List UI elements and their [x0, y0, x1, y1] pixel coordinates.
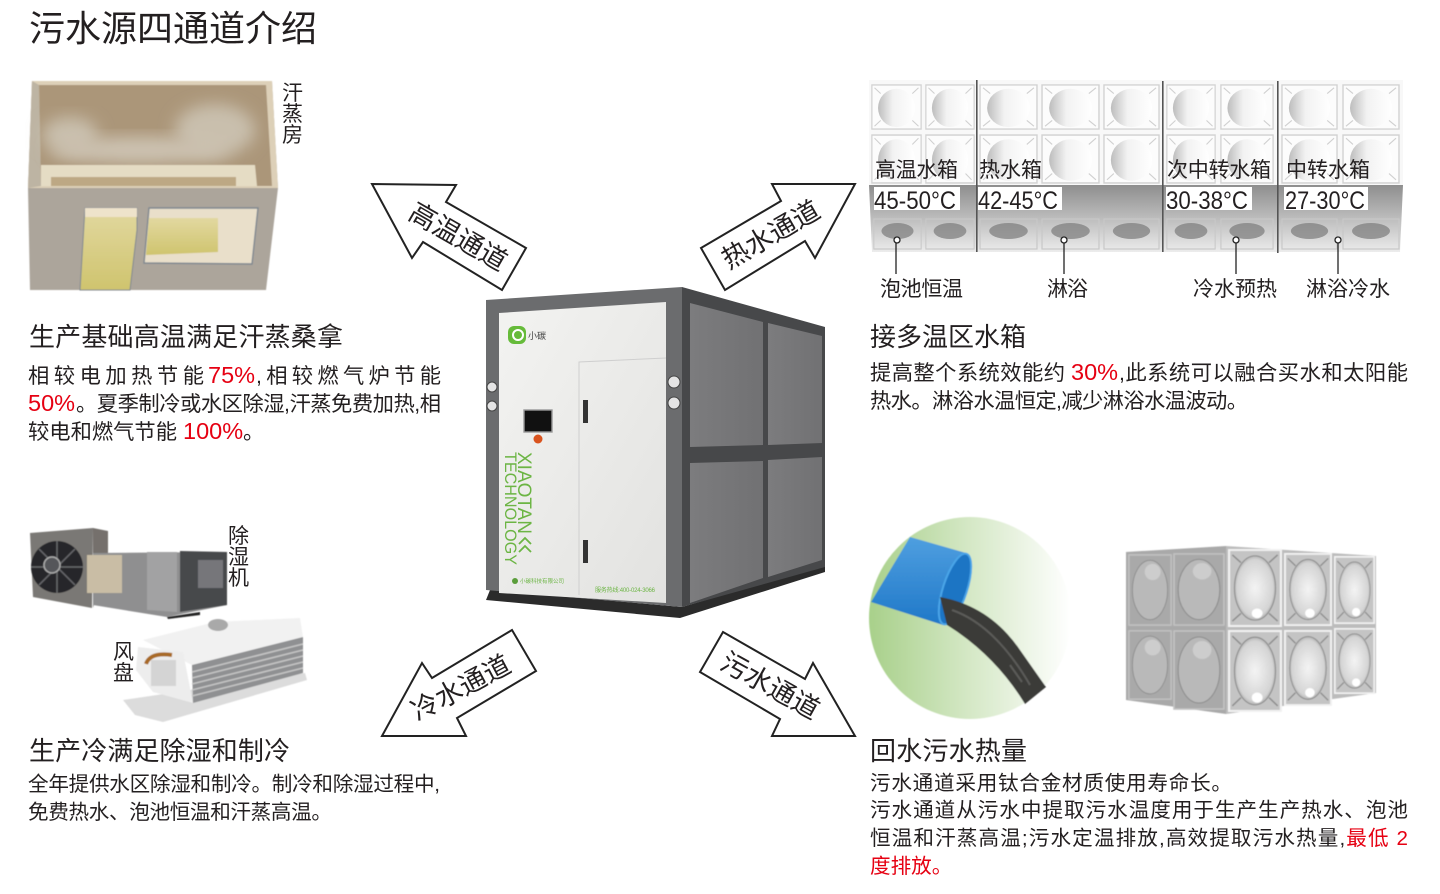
- pointer: shower cold water: 淋浴冷水: [1306, 278, 1390, 301]
- arrow: sewage channel: 污水通道: [715, 647, 825, 725]
- tank label: hot water: [978, 159, 1062, 215]
- tank label: high temperature: [874, 159, 960, 215]
- body text: 提高整个系统效能约: [870, 361, 1065, 385]
- label: dehumidifier: 除: [228, 525, 249, 548]
- arrow: hot water channel: [701, 184, 855, 290]
- tank label: secondary transfer: [1166, 159, 1271, 215]
- arrow: cold water channel: [382, 630, 536, 736]
- body text: 热水。淋浴水温恒定,减少淋浴水温波动。: [870, 389, 1248, 413]
- body text: ,此系统可以融合买水和太阳能: [1119, 361, 1408, 385]
- small print: 服务热线:400-024-3066: [595, 586, 656, 594]
- heading: 回水污水热量: [870, 736, 1027, 766]
- tank label: hot water: 42-45°C: [978, 187, 1058, 215]
- body text: 50%: [28, 390, 75, 416]
- tank label: secondary transfer: 30-38°C: [1166, 187, 1248, 215]
- logo: 小碳: [528, 330, 546, 341]
- label: fan coil: 风: [113, 641, 134, 664]
- brand text: TECHNOLOGY: [501, 452, 519, 565]
- tank label: high temperature: 45-50°C: [874, 187, 956, 215]
- label: dehumidifier: [228, 525, 249, 590]
- panel: hot water channel: [869, 80, 1408, 413]
- illustration: multi-temperature water tanks: [869, 80, 1403, 253]
- label: dehumidifier: 机: [228, 567, 249, 590]
- label: fan coil: [113, 641, 134, 685]
- pointer: shower: [1047, 237, 1088, 301]
- pointer: cold water preheat: [1193, 237, 1277, 301]
- brand text: [501, 452, 534, 565]
- machine front: [486, 287, 682, 607]
- body text: [28, 773, 440, 824]
- illustration: stainless steel tank: [1126, 546, 1376, 714]
- machine side: [682, 287, 825, 607]
- label: sauna room: 汗: [282, 82, 303, 105]
- tank label: transfer: [1284, 159, 1370, 215]
- body text: 100%: [183, 418, 243, 444]
- pointer: shower cold water: [1306, 237, 1390, 301]
- illustration: fan coil: [123, 618, 307, 722]
- body text: [28, 362, 441, 444]
- pointer: pool constant temperature: [880, 237, 963, 301]
- body text: 相较电加热节能: [28, 364, 204, 388]
- panel: cold water channel: [28, 525, 440, 824]
- center machine: heat pump unit: [486, 287, 825, 618]
- small print: 小碳科技有限公司: [520, 577, 564, 585]
- body text: 恒温和汗蒸高温;污水定温排放,高效提取污水热量,最低 2: [870, 827, 1408, 850]
- label: dehumidifier: 湿: [228, 546, 249, 569]
- panel: high temperature channel: [28, 81, 441, 444]
- illustration: dehumidifier: [30, 528, 227, 619]
- arrow: sewage channel: [700, 632, 855, 736]
- heading: 生产冷满足除湿和制冷: [29, 736, 290, 766]
- brand text: XIAOTAN: [513, 452, 534, 534]
- tank label: transfer: 中转水箱: [1286, 159, 1370, 182]
- small print: [512, 577, 656, 594]
- tank label: transfer: 27-30°C: [1285, 187, 1365, 215]
- tank label: secondary transfer: 次中转水箱: [1167, 159, 1271, 182]
- body text: 30%: [1071, 359, 1118, 385]
- body text: 度排放。: [870, 855, 952, 878]
- label: sauna room: 蒸: [282, 103, 303, 126]
- tank label: hot water: 热水箱: [979, 159, 1042, 182]
- pointer: pool constant temperature: 泡池恒温: [880, 278, 963, 301]
- control screen: [524, 410, 552, 444]
- arrow: high temperature channel: [372, 184, 526, 290]
- arrow: high temperature channel: 高温通道: [404, 197, 512, 277]
- arrow: hot water channel: 热水通道: [717, 195, 825, 275]
- heading: 接多温区水箱: [870, 322, 1026, 352]
- body text: 污水通道从污水中提取污水温度用于生产生产热水、泡池: [870, 799, 1408, 822]
- logo: [508, 326, 546, 344]
- label: fan coil: 盘: [113, 662, 134, 685]
- title: 污水源四通道介绍: [29, 8, 317, 49]
- arrow: cold water channel: 冷水通道: [406, 649, 516, 727]
- gauges: [487, 376, 680, 411]
- body text: [870, 359, 1408, 413]
- tank label: high temperature: 高温水箱: [875, 159, 958, 182]
- body text: ,相较燃气炉节能: [256, 364, 441, 388]
- body text: 全年提供水区除湿和制冷。制冷和除湿过程中,: [28, 773, 440, 796]
- body text: 免费热水、泡池恒温和汗蒸高温。: [28, 801, 332, 824]
- heading: 生产基础高温满足汗蒸桑拿: [29, 322, 343, 352]
- pointer: shower: 淋浴: [1047, 278, 1088, 301]
- label: sauna room: 房: [282, 124, 303, 147]
- body text: 。: [243, 420, 264, 444]
- body text: 较电和燃气节能: [28, 420, 177, 444]
- pointer: cold water preheat: 冷水预热: [1193, 278, 1277, 301]
- illustration: sauna room: [28, 81, 278, 290]
- body text: 75%: [208, 362, 255, 388]
- body text: 污水通道采用钛合金材质使用寿命长。: [870, 772, 1232, 795]
- body text: [870, 772, 1408, 878]
- label: sauna room: [282, 82, 303, 147]
- illustration: sewage pipe: [869, 517, 1071, 719]
- panel: sewage channel: [869, 517, 1408, 878]
- machine base: [486, 565, 825, 618]
- body text: 。夏季制冷或水区除湿,汗蒸免费加热,相: [76, 392, 441, 416]
